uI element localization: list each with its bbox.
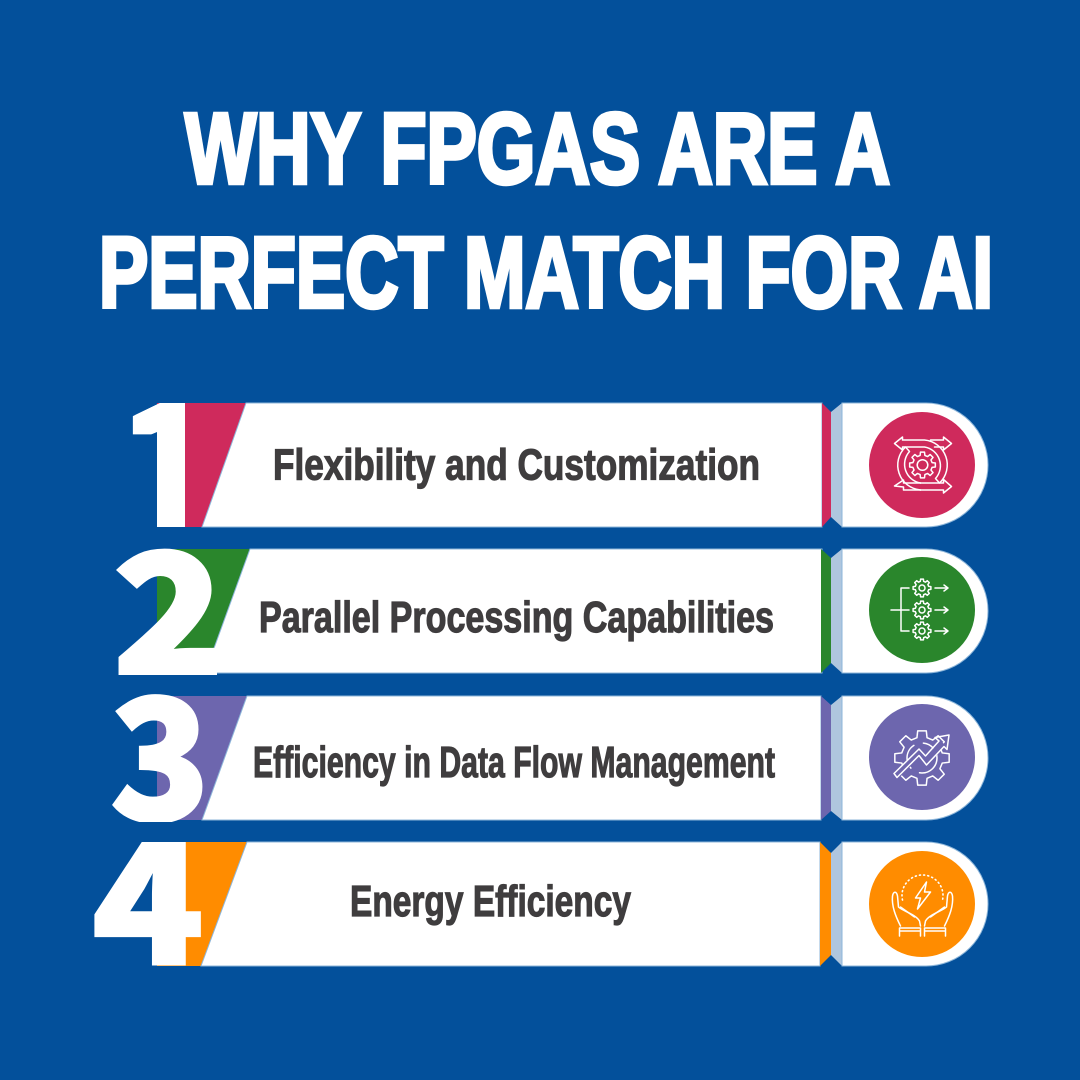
icon circle 2 bbox=[869, 557, 975, 663]
side stripe 3 bbox=[821, 696, 831, 820]
number 1: 1 bbox=[120, 321, 215, 582]
title bbox=[99, 93, 993, 329]
white bar 2 bbox=[205, 549, 822, 673]
label 4: Energy Efficiency bbox=[350, 877, 631, 926]
color wedge 3 bbox=[157, 696, 247, 820]
number 3: 3 bbox=[110, 626, 210, 869]
icon: gears flow bbox=[891, 579, 948, 640]
icon: gear with growth arrow bbox=[894, 731, 949, 785]
color wedge 4 bbox=[157, 842, 247, 966]
panel: row 1 flexibility and customization bbox=[132, 402, 988, 528]
panel: row 4 energy efficiency bbox=[94, 842, 988, 966]
number 2: 2 bbox=[113, 481, 225, 724]
icon: hands with energy bolt bbox=[892, 875, 953, 936]
panel: row 2 parallel processing capabilities bbox=[116, 548, 988, 675]
white bar 4 bbox=[201, 842, 820, 966]
end cap 2 bbox=[842, 549, 988, 673]
light fold 4 bbox=[831, 842, 842, 966]
end cap 1 bbox=[842, 403, 988, 527]
icon circle 4 bbox=[869, 851, 975, 957]
panel: row 3 efficiency in data flow management bbox=[112, 694, 988, 822]
icon circle 3 bbox=[869, 704, 975, 810]
label 3: Efficiency in Data Flow Management bbox=[253, 738, 775, 787]
number 4: 4 bbox=[92, 770, 204, 1013]
color wedge 2 bbox=[157, 549, 250, 673]
white bar 1 bbox=[202, 403, 822, 527]
side stripe 4 bbox=[820, 842, 831, 966]
end cap 4 bbox=[842, 842, 988, 966]
light fold 2 bbox=[831, 549, 842, 673]
white bar 3 bbox=[202, 696, 821, 820]
label 2: Parallel Processing Capabilities bbox=[259, 593, 774, 642]
side stripe 2 bbox=[821, 549, 831, 673]
light fold 3 bbox=[831, 696, 842, 820]
label 1: Flexibility and Customization bbox=[273, 440, 760, 490]
light fold 1 bbox=[831, 403, 842, 527]
side stripe 1 bbox=[822, 403, 831, 527]
end cap 3 bbox=[842, 696, 988, 820]
color wedge 1 bbox=[157, 403, 246, 527]
icon circle 1 bbox=[869, 412, 975, 518]
icon: gear with arrows bbox=[894, 437, 952, 493]
